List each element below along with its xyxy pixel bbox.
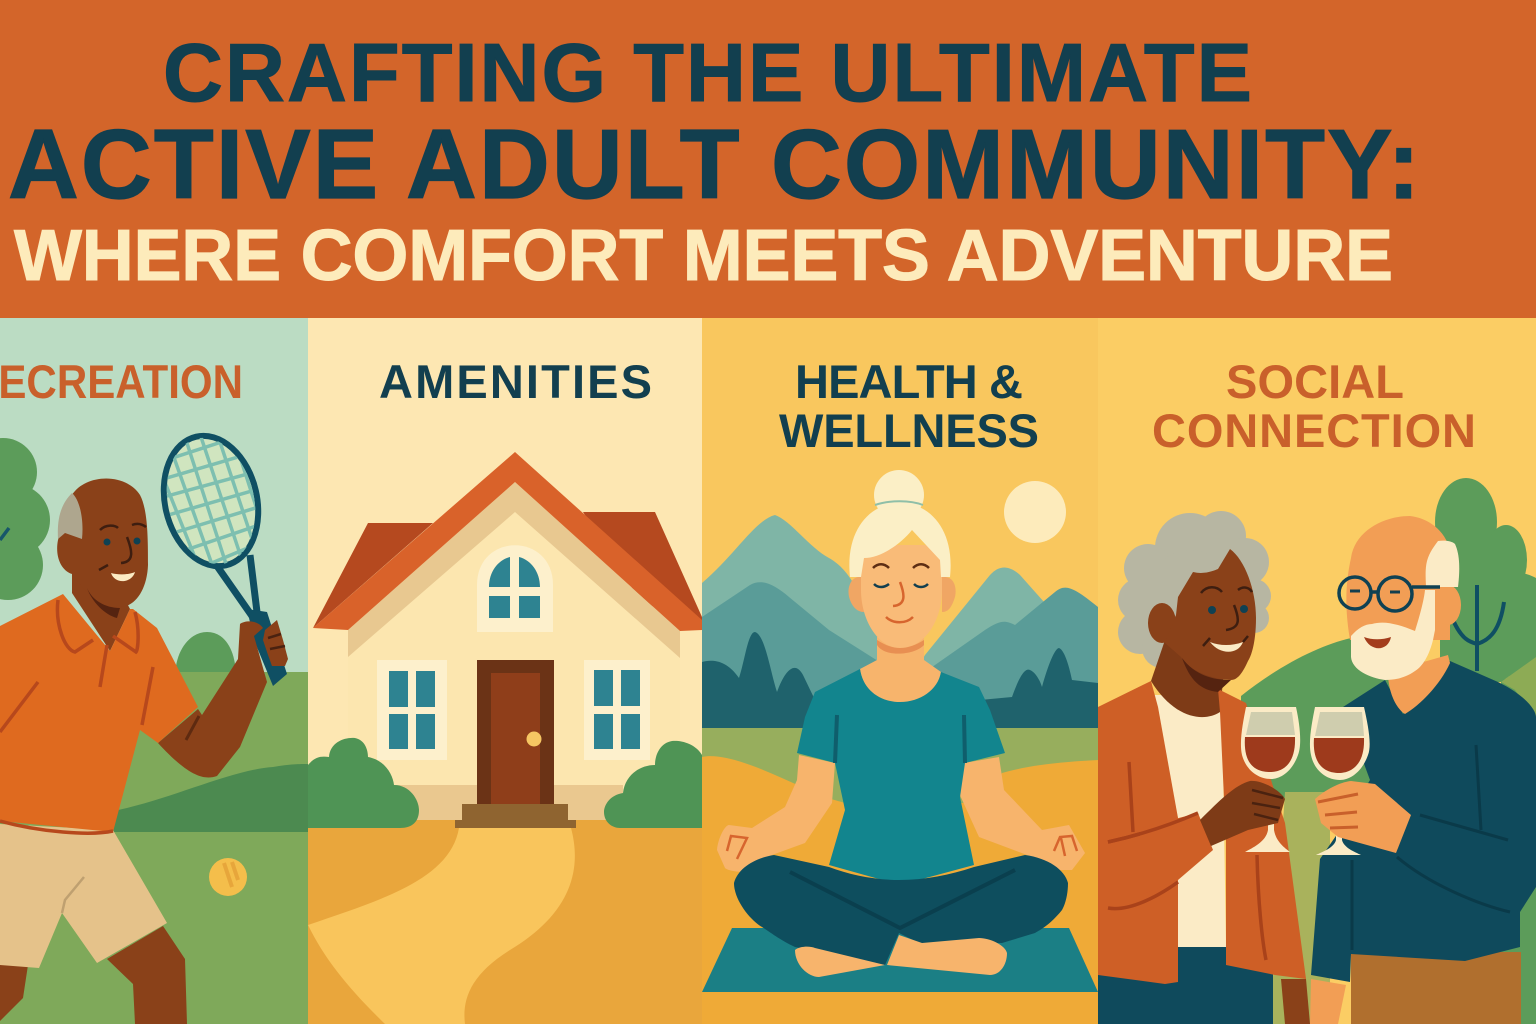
- legs: [0, 926, 187, 1024]
- right bush: [604, 741, 702, 828]
- title line 1: CRAFTING THE ULTIMATE: [163, 26, 1252, 119]
- shirt details: [0, 600, 153, 833]
- tree: [0, 438, 50, 600]
- heading: amenities: AMENITIES: [379, 355, 652, 408]
- tennis racket: [151, 426, 287, 686]
- main gable roof: [313, 452, 702, 631]
- garden path: [308, 828, 575, 1024]
- wine glass left: [1241, 707, 1300, 852]
- head: [57, 478, 148, 607]
- ear: [1148, 603, 1176, 643]
- mudra lines: [727, 836, 1077, 859]
- panel: recreation: [0, 318, 308, 1024]
- man with wine: [1310, 516, 1536, 1024]
- house: [313, 452, 702, 828]
- heading: social connection: CONNECTION: [1152, 404, 1476, 457]
- neck: [1151, 640, 1225, 717]
- jacket left: [1098, 681, 1178, 984]
- heading: health and wellness: [779, 365, 1038, 448]
- grass field: [0, 672, 308, 1024]
- header banner: [0, 0, 1536, 318]
- ear: [1435, 585, 1461, 625]
- hair: [58, 493, 83, 539]
- heading: social connection: [1152, 355, 1476, 457]
- sweater: [1311, 661, 1536, 982]
- wall: [395, 783, 623, 785]
- sleeve: [1140, 813, 1213, 895]
- beard: [1351, 590, 1435, 680]
- woman: meditating: [717, 470, 1085, 977]
- dark hill: [113, 764, 308, 832]
- panel: amenities: [308, 318, 702, 1024]
- left bush: [308, 738, 419, 828]
- trousers: [1098, 945, 1273, 1024]
- left window: [377, 660, 447, 760]
- shorts: [0, 824, 167, 968]
- feet: [795, 935, 1007, 977]
- trousers: [1351, 952, 1521, 1024]
- hair: [1118, 511, 1271, 668]
- head: [1346, 516, 1450, 640]
- facial features: [1182, 587, 1252, 692]
- sun: [1004, 481, 1066, 543]
- face features: [87, 524, 146, 618]
- man: tennis player: [0, 426, 288, 1024]
- heading: health and wellness: HEALTH &: [795, 355, 1023, 408]
- steps: [455, 804, 576, 828]
- ground: [702, 756, 1098, 1024]
- white hair: [1426, 541, 1459, 587]
- background bush: [176, 632, 235, 672]
- yoga mat: [702, 928, 1098, 992]
- mountains: [702, 515, 1098, 728]
- heading: social connection: SOCIAL: [1226, 355, 1404, 408]
- foundation: [395, 783, 623, 820]
- eyes and brow: [1350, 591, 1400, 592]
- white top: [1150, 695, 1226, 947]
- mouth: [1364, 637, 1391, 648]
- face: [861, 545, 942, 648]
- jacket right: [1218, 689, 1306, 979]
- woman with wine: [1098, 511, 1310, 1024]
- neck: [860, 637, 941, 705]
- bun: [874, 470, 924, 520]
- hair band: [875, 501, 923, 505]
- sweater seams: [1352, 745, 1510, 950]
- gable inner band: [348, 482, 680, 658]
- subtitle: WHERE COMFORT MEETS ADVENTURE: [14, 216, 1393, 296]
- attic window: [477, 545, 553, 632]
- neck: [1388, 655, 1450, 714]
- heading: health and wellness: WELLNESS: [779, 404, 1039, 457]
- neck shadow: [877, 640, 924, 654]
- shirt: [0, 594, 198, 832]
- arm: [158, 621, 267, 777]
- light hill strip: [1270, 792, 1330, 1024]
- facial features: [873, 564, 929, 622]
- ground: [308, 820, 702, 1024]
- ears: [848, 577, 956, 612]
- right window: [584, 660, 650, 760]
- face: [1165, 549, 1256, 680]
- panel: social connection: [1098, 318, 1536, 1024]
- title line 2: ACTIVE ADULT COMMUNITY:: [8, 109, 1420, 219]
- panel: health and wellness: [702, 318, 1098, 1024]
- tennis ball: [209, 858, 247, 896]
- man hand: [1315, 781, 1411, 853]
- side roofs: [313, 512, 702, 630]
- hair: [849, 503, 951, 577]
- neck: [72, 570, 130, 651]
- lower arm: [1281, 979, 1310, 1024]
- jacket seams: [1108, 762, 1266, 960]
- tree: [1435, 478, 1536, 682]
- meadow: [702, 728, 1098, 810]
- hills: [1241, 638, 1450, 800]
- fingers: [263, 620, 288, 666]
- lower hand: [1310, 979, 1346, 1024]
- arms: [717, 755, 1085, 872]
- door: [477, 660, 554, 804]
- shirt: [797, 669, 1005, 885]
- woman hand: [1200, 781, 1285, 846]
- wine glass right: [1310, 707, 1370, 855]
- legs: [734, 855, 1068, 965]
- glasses: [1339, 577, 1440, 611]
